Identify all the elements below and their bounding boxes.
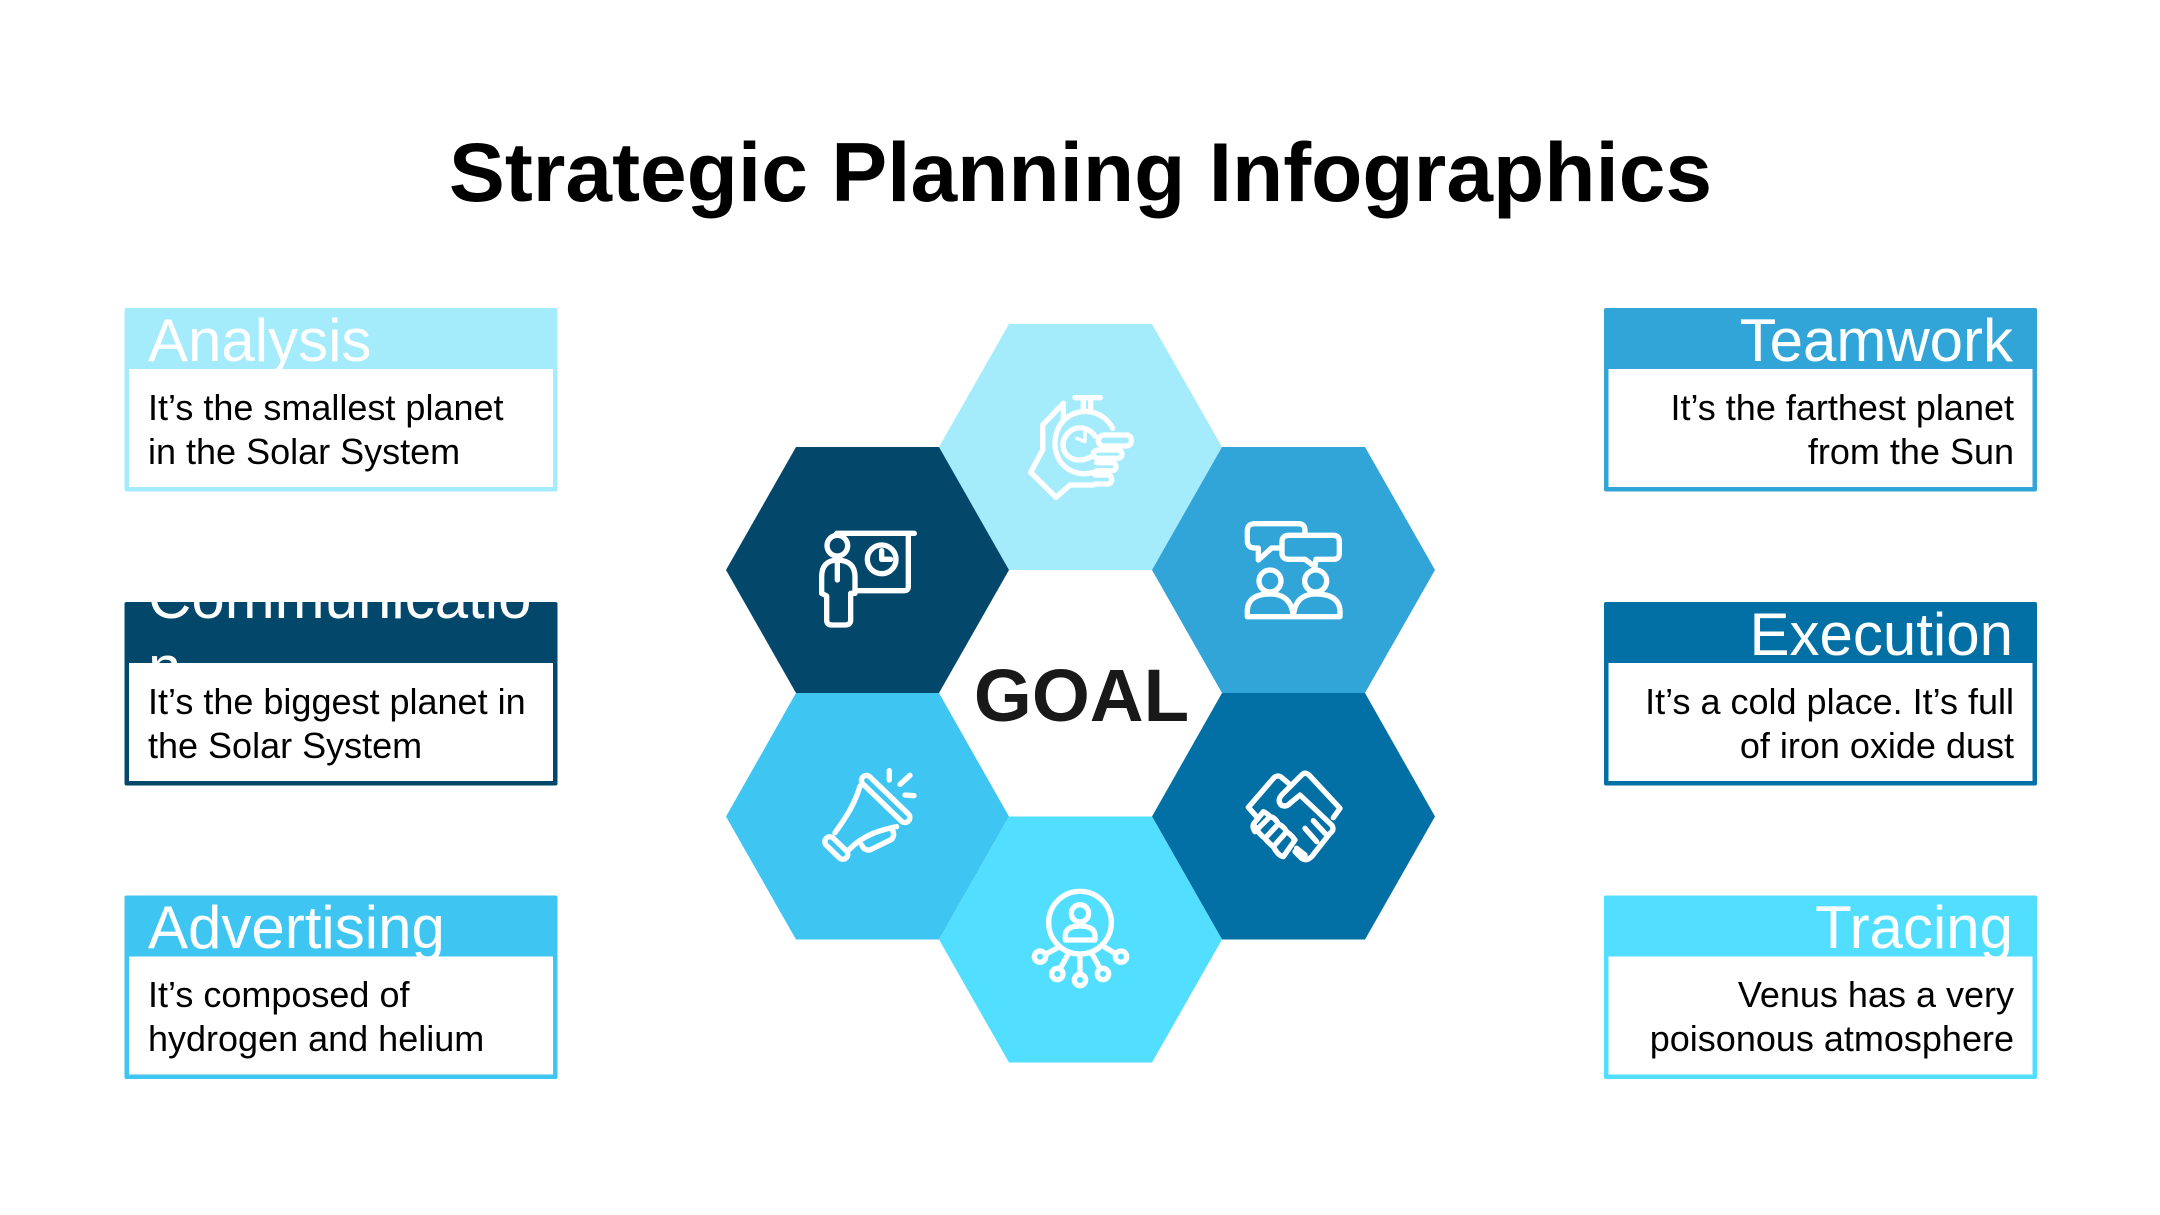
teamwork card body (1608, 369, 2032, 487)
advertising card body (129, 956, 553, 1074)
teamwork description: from the Sun (1808, 431, 2014, 472)
panel: advertising (124, 894, 558, 1079)
analysis card body (129, 369, 553, 487)
panel: analysis (124, 307, 558, 492)
teamwork description: It’s the farthest planet (1670, 387, 2014, 428)
panel: teamwork (1604, 307, 2037, 492)
teamwork heading: Teamwork (1740, 307, 2014, 374)
tracing description: poisonous atmosphere (1650, 1018, 2014, 1059)
execution description: of iron oxide dust (1740, 725, 2014, 766)
communication card body (129, 663, 553, 781)
title: Strategic Planning Infographics (449, 125, 1712, 219)
icon: handshake (1248, 773, 1340, 860)
icon: megaphone (823, 771, 914, 861)
icon: stopwatch in hand (1031, 398, 1131, 497)
icon: person network (1034, 891, 1127, 986)
tracing description: Venus has a very (1738, 974, 2014, 1015)
teamwork card frame (1604, 308, 2037, 492)
panel: tracing (1604, 894, 2037, 1079)
hexagon: advertising (726, 693, 1009, 940)
advertising card frame (124, 896, 558, 1079)
hexagon: analysis (939, 324, 1222, 570)
execution card body (1608, 663, 2032, 781)
advertising description: It’s composed of (148, 974, 410, 1015)
icon: presenter with board (822, 533, 914, 625)
hexagon: tracing (939, 816, 1222, 1062)
communication heading, wrapped and overflowing: Communicatio (148, 564, 531, 631)
icon: two people talking (1247, 524, 1340, 617)
analysis card frame (124, 308, 558, 492)
communication description: the Solar System (148, 725, 422, 766)
execution card frame (1604, 602, 2037, 786)
analysis description: It’s the smallest planet (148, 387, 504, 428)
analysis description: in the Solar System (148, 431, 460, 472)
center label: GOAL (974, 654, 1189, 737)
hexagon: communication (726, 447, 1009, 693)
execution heading: Execution (1750, 601, 2013, 668)
hexagon: execution (1152, 693, 1435, 940)
communication heading, wrapped and overflowing: n (148, 634, 181, 701)
hexagon cluster (726, 324, 1435, 1062)
advertising heading: Advertising (148, 894, 445, 961)
analysis heading: Analysis (148, 307, 371, 374)
advertising description: hydrogen and helium (148, 1018, 484, 1059)
tracing card body (1608, 956, 2032, 1074)
tracing heading: Tracing (1815, 894, 2013, 961)
execution description: It’s a cold place. It’s full (1645, 681, 2014, 722)
panel: execution (1604, 601, 2037, 786)
communication card frame (124, 602, 558, 786)
tracing card frame (1604, 896, 2037, 1079)
hexagon: teamwork (1152, 447, 1435, 693)
panel: communication (124, 564, 558, 786)
communication description: It’s the biggest planet in (148, 681, 526, 722)
